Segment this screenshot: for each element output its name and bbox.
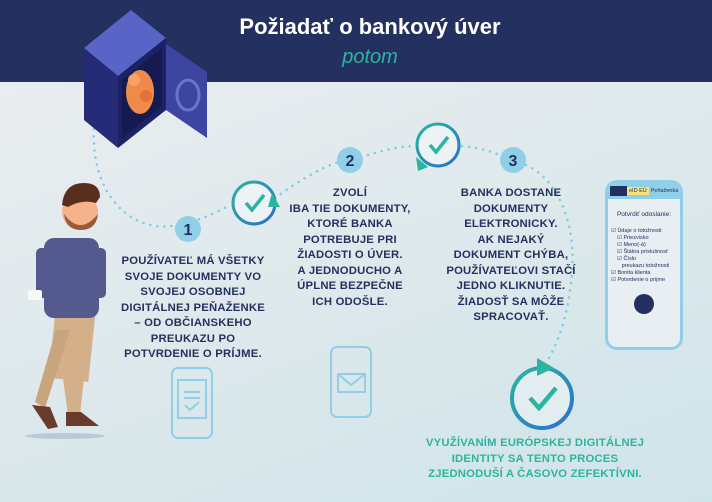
step number 2: 2 [346, 153, 355, 170]
text: conclusion: IDENTITY SA TENTO PROCES [452, 452, 618, 464]
text: step 1: SVOJE DOKUMENTY VO [125, 270, 261, 282]
dotted path [94, 108, 573, 375]
text: step 1: SVOJEJ OSOBNEJ [140, 286, 246, 298]
wallet content: ☑ Meno(-á) [617, 242, 646, 248]
subtitle: potom [342, 46, 398, 68]
text: step 1: POUŽÍVATEĽ MÁ VŠETKY [122, 255, 264, 267]
text: step 1: DIGITÁLNEJ PEŇAŽENKE [121, 302, 265, 314]
step number 3: 3 [509, 153, 518, 170]
text: step 2: KTORÉ BANKA [307, 218, 393, 230]
text: step 3: BANKA DOSTANE [461, 187, 561, 199]
icon: phone document [172, 368, 212, 438]
wallet header: Peňaženka [651, 188, 678, 194]
wallet content: ☑ Priezvisko [617, 235, 649, 241]
wallet content: ☑ Potvrdenie o príjme [611, 277, 665, 283]
title: Požiadať o bankový úver [239, 14, 501, 39]
text: step 2: A JEDNODUCHO A [298, 264, 402, 276]
step number 1 [175, 216, 201, 242]
text: step 1 [121, 254, 265, 360]
text: step 2: POTREBUJE PRI [303, 234, 397, 246]
person [25, 183, 106, 439]
text: step 3: ELEKTRONICKY. [464, 218, 558, 230]
text: step 2: ZVOLÍ [333, 187, 367, 199]
text: step 2: ICH ODOŠLE. [312, 296, 388, 308]
text: step 3: DOKUMENTY [474, 202, 548, 214]
text: step 3: DOKUMENT CHÝBA, [454, 249, 568, 261]
text: step 1: PREUKAZU PO [151, 332, 235, 344]
step number 1: 1 [184, 222, 193, 239]
icon: clock large [512, 358, 572, 428]
text: conclusion: ZJEDNODUŠÍ A ČASOVO ZEFEKTÍVNI. [428, 468, 642, 480]
wallet content: ☑ Údaje o totožnosti [611, 228, 662, 234]
text: conclusion: VYUŽÍVANÍM EURÓPSKEJ DIGITÁLNEJ [426, 437, 644, 449]
text: step 3: SPRACOVAŤ. [473, 311, 549, 323]
header band [0, 0, 712, 82]
wallet content: preukazu totožnosti [622, 263, 669, 269]
panel: eID wallet phone [605, 180, 683, 350]
wallet content: ☑ Bonita klienta [611, 270, 650, 276]
text: step 3 [446, 187, 576, 323]
step number 3 [500, 147, 526, 173]
text: step 2: ŽIADOSTI O ÚVER. [297, 249, 403, 261]
text: step 3: AK NEJAKÝ [477, 234, 545, 246]
text: step 2: ÚPLNE BEZPEČNE [297, 280, 403, 292]
text: step 3: POUŽÍVATEĽOVI STAČÍ [446, 264, 576, 276]
icon: clock 1 [233, 182, 280, 224]
text: step 3: ŽIADOSŤ SA MÔŽE [458, 296, 564, 308]
icon: phone envelope [331, 347, 371, 417]
step number 2 [337, 147, 363, 173]
text: step 1: POTVRDENIE O PRÍJME. [124, 348, 262, 360]
text: step 2: IBA TIE DOKUMENTY, [289, 202, 411, 214]
wallet content: Potvrdiť odoslanie: [617, 211, 671, 218]
wallet header: eID EÚ [629, 188, 647, 194]
text: conclusion [426, 436, 644, 480]
icon: clock 2 [416, 124, 459, 171]
text: step 3: JEDNO KLIKNUTIE. [457, 280, 565, 292]
wallet content: ☑ Číslo [617, 256, 636, 262]
text: step 1: – OD OBČIANSKEHO [134, 317, 252, 329]
icon: safe [84, 10, 207, 148]
wallet content [611, 211, 671, 314]
wallet content: ☑ Štátna príslušnosť [617, 249, 668, 255]
wallet header [608, 183, 680, 199]
text: step 2 [289, 186, 411, 308]
